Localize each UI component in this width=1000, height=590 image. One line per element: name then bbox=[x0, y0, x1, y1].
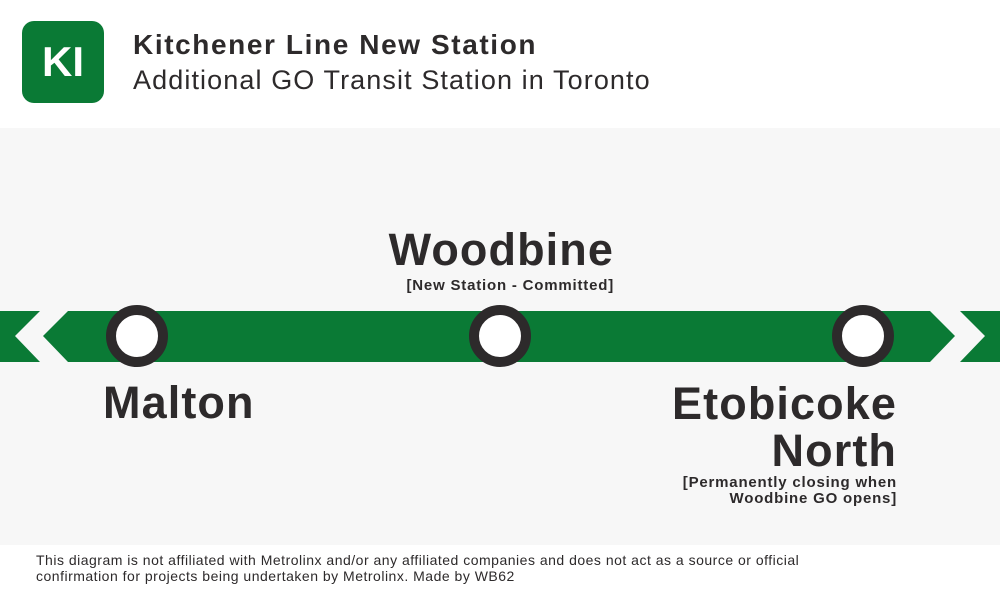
footer disclaimer: This diagram is not affiliated with Metrolinx and/or any affiliated companies and does not act as a source or official bbox=[36, 552, 799, 568]
station: Etobicoke North: North bbox=[772, 425, 897, 476]
station: Woodbine: Woodbine bbox=[389, 224, 614, 275]
station: Etobicoke North bbox=[672, 378, 897, 507]
icon: KI line logo bbox=[22, 21, 104, 103]
station markers bbox=[111, 310, 889, 362]
title: Kitchener Line New Station bbox=[133, 29, 537, 60]
station: Woodbine: [New Station - Committed] bbox=[406, 277, 614, 294]
background band bbox=[0, 128, 1000, 545]
line: Kitchener route bbox=[43, 311, 955, 362]
station: Etobicoke North: Woodbine GO opens] bbox=[730, 490, 897, 507]
footer disclaimer: confirmation for projects being undertaken by Metrolinx. Made by WB62 bbox=[36, 568, 515, 584]
station: Etobicoke North: Etobicoke bbox=[672, 378, 897, 429]
icon: KI line logo: KI bbox=[42, 38, 84, 85]
header bbox=[22, 21, 651, 103]
station: Etobicoke North: [Permanently closing when bbox=[683, 474, 897, 491]
arrow: left direction bbox=[0, 311, 1000, 362]
footer disclaimer bbox=[36, 552, 799, 584]
subtitle: Additional GO Transit Station in Toronto bbox=[133, 65, 651, 95]
station: Malton: Malton bbox=[103, 377, 255, 428]
